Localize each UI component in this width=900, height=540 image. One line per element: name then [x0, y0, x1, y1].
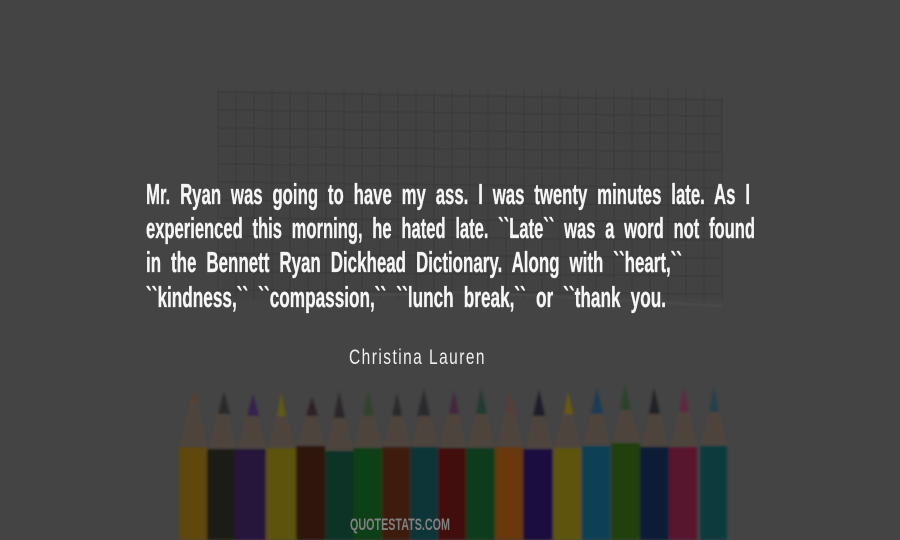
quote text [146, 179, 755, 314]
author name: Christina Lauren [349, 346, 486, 369]
graph paper background [218, 90, 724, 306]
pencil 9 [410, 389, 438, 540]
pencil 17 [640, 388, 669, 540]
pencil 5 [296, 397, 325, 540]
watermark: QUOTESTATS.COM [350, 515, 450, 534]
coloured pencils [179, 385, 727, 540]
pencil 14 [553, 391, 581, 540]
pencil 2 [207, 391, 236, 540]
pencil 3 [235, 394, 266, 540]
pencil 18 [669, 388, 697, 540]
pencil 8 [382, 393, 410, 540]
pencil 19 [700, 386, 727, 540]
pencil 1 [179, 390, 207, 540]
pencil 11 [466, 388, 495, 540]
pencil 16 [611, 385, 640, 540]
pencil 13 [523, 390, 553, 540]
pencil 7 [353, 390, 382, 540]
pencil 4 [266, 392, 296, 540]
pencil 15 [582, 388, 610, 540]
pencil 12 [495, 390, 523, 540]
pencil 6 [325, 391, 353, 540]
pencil 10 [438, 390, 466, 540]
